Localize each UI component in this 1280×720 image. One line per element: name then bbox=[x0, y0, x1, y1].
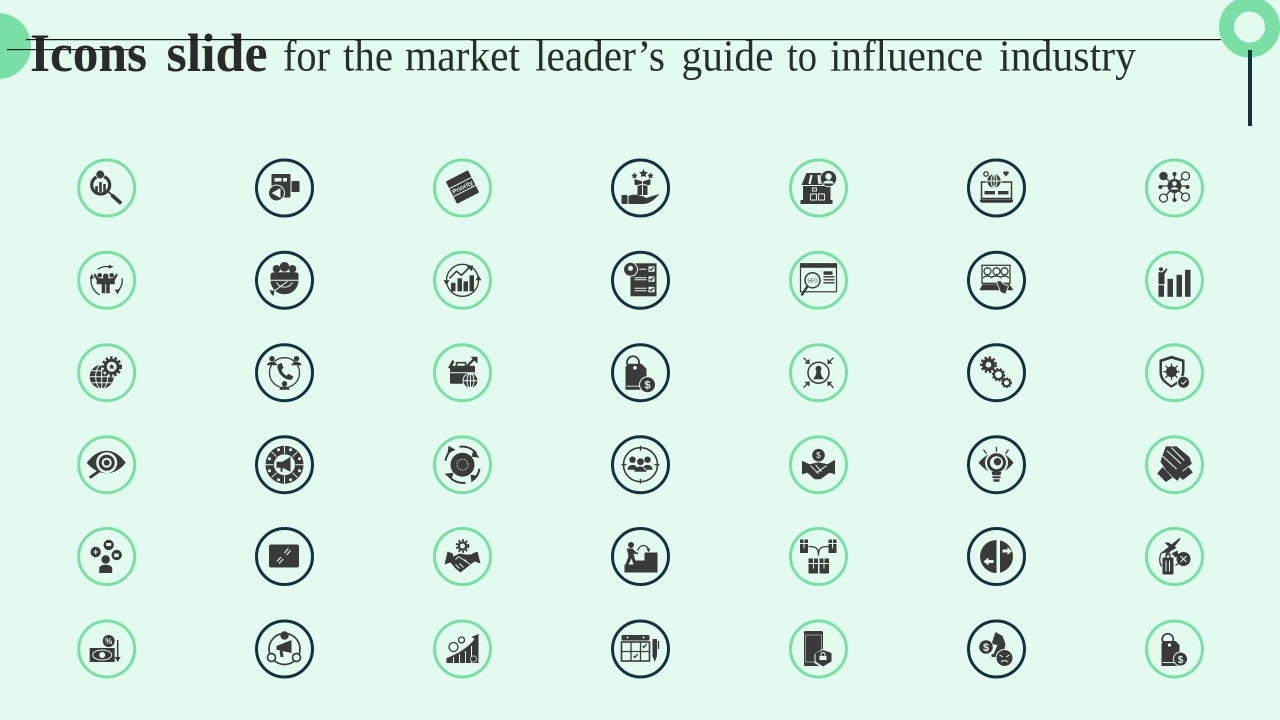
icon: broken link card bbox=[256, 528, 312, 584]
icon: circle with opposing arrows bbox=[968, 528, 1024, 584]
icon: laptop with globe bbox=[968, 160, 1024, 216]
icon: growth graph with gears bbox=[434, 621, 490, 677]
icon: person climbing stairs bbox=[612, 528, 668, 584]
icon: chess pawn in target with arrows bbox=[790, 345, 846, 401]
icon: chess knight with dollar and angry face: $ bbox=[983, 642, 989, 654]
icon: price tag with dollar bbox=[612, 345, 668, 401]
icon: plane and luggage cancelled bbox=[1146, 528, 1202, 584]
icon: globe with award gear bbox=[79, 345, 135, 401]
icon: gear with cycle arrows bbox=[434, 437, 490, 493]
title: influence bbox=[830, 30, 983, 80]
icon: magnifier with chart bbox=[79, 160, 135, 216]
title: to bbox=[787, 30, 817, 80]
icon: briefcase with globe and arrow bbox=[434, 345, 490, 401]
icon: phone with connected people bbox=[256, 345, 312, 401]
icon: SEO browser window bbox=[790, 252, 846, 308]
icon: eye lightbulb bbox=[968, 437, 1024, 493]
title: leader’s bbox=[535, 30, 665, 80]
title: the bbox=[343, 30, 393, 80]
vertical accent bar bbox=[1248, 50, 1252, 126]
icon: chess knight with dollar and angry face bbox=[968, 621, 1024, 677]
icon: target audience bbox=[612, 437, 668, 493]
icon: team with cycle arrows bbox=[79, 252, 135, 308]
icon: store with customer bbox=[790, 160, 846, 216]
icon: price tag with dollar small: $ bbox=[1178, 655, 1184, 666]
icon: eye with magnifier bbox=[79, 437, 135, 493]
title: Icons bbox=[30, 23, 147, 83]
icon: network hub bbox=[1146, 160, 1202, 216]
header rule bbox=[7, 39, 1221, 50]
icon: person with bubbles bbox=[79, 528, 135, 584]
title: market bbox=[405, 30, 521, 80]
decorative circle: top left bbox=[0, 13, 31, 79]
icon: price tag with dollar: $ bbox=[644, 380, 651, 392]
icon: group with target and arrow bbox=[256, 252, 312, 308]
title bbox=[30, 23, 1137, 83]
icon: video camera with megaphone bbox=[256, 160, 312, 216]
title: slide bbox=[166, 23, 268, 83]
icon: SEO browser window: SEO bbox=[807, 278, 818, 284]
decorative ring: top right bbox=[1226, 4, 1272, 50]
icon: megaphone in audience wheel bbox=[256, 437, 312, 493]
title: guide bbox=[682, 30, 774, 80]
icon: checklist with badge bbox=[612, 252, 668, 308]
icon: phone with security shield bbox=[790, 621, 846, 677]
icon: clasped hands bbox=[1146, 437, 1202, 493]
icon: presenter with bar chart bbox=[1146, 252, 1202, 308]
icon: handshake with dollar coin bbox=[790, 437, 846, 493]
icon: priority tag bbox=[434, 160, 490, 216]
icon: growth chart in cycle bbox=[434, 252, 490, 308]
title: for bbox=[283, 30, 330, 80]
title: industry bbox=[999, 30, 1137, 80]
icon: calendar with pen bbox=[612, 621, 668, 677]
icon: box on hand with stars bbox=[612, 160, 668, 216]
icon: three gears bbox=[968, 345, 1024, 401]
icon: priority tag: Priority bbox=[451, 179, 475, 196]
icon: handshake with gear bbox=[434, 528, 490, 584]
icon: cash with discount: % bbox=[105, 637, 112, 646]
icon: shield with virus and check bbox=[1146, 345, 1202, 401]
icon: megaphone with network ring bbox=[256, 621, 312, 677]
icon: dividing buildings bbox=[790, 528, 846, 584]
icon: price tag with dollar small bbox=[1146, 621, 1202, 677]
icon: handshake with dollar coin: $ bbox=[816, 450, 821, 460]
icon: laptop with people and hand bbox=[968, 252, 1024, 308]
icon: cash with discount bbox=[79, 621, 135, 677]
